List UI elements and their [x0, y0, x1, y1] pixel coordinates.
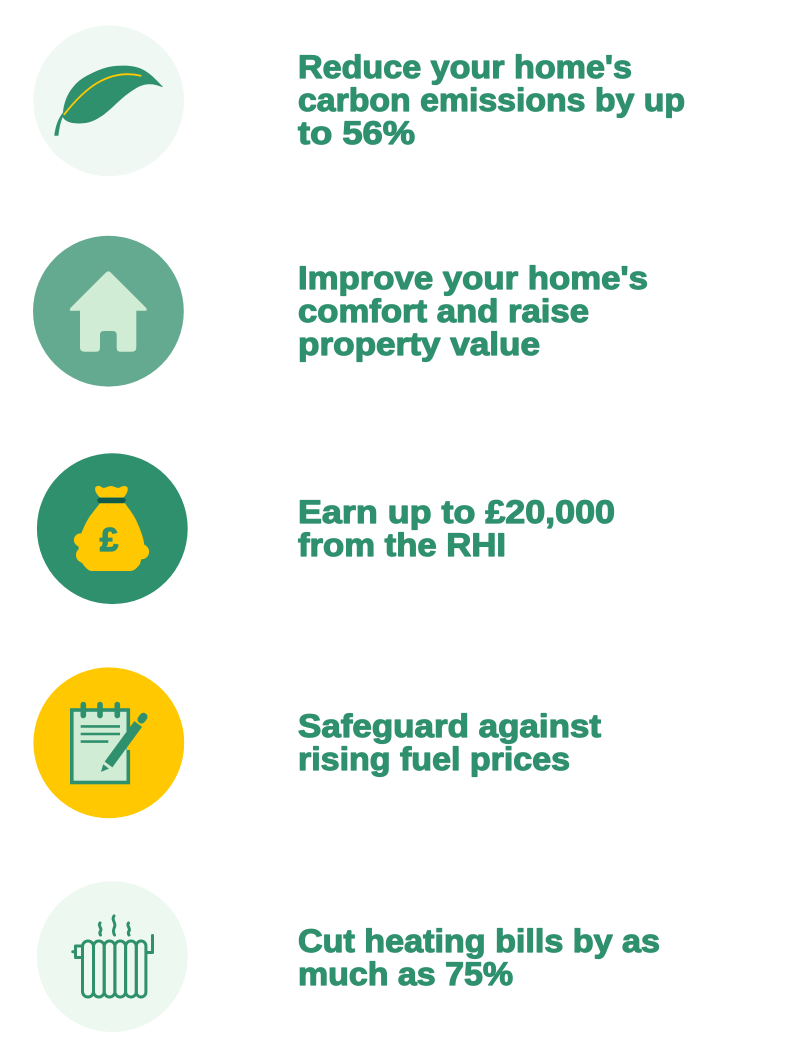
text: heating bills: much as 75%: [298, 956, 513, 992]
text: fuel prices: Safeguard against: [298, 708, 601, 744]
row: RHI earnings: [37, 453, 615, 604]
icon: pound sign: £: [100, 521, 119, 558]
icon: radiator: [37, 881, 188, 1032]
icon: leaf: [33, 25, 184, 176]
row: comfort and value: [33, 236, 648, 387]
text: RHI earnings: from the RHI: [298, 527, 506, 563]
row: heating bills: [37, 881, 660, 1032]
text: comfort and value: [298, 260, 648, 362]
text: carbon emissions: [298, 49, 685, 151]
icon: house: [33, 236, 184, 387]
text: heating bills: Cut heating bills by as: [298, 923, 660, 959]
text: comfort and value: comfort and raise: [298, 293, 589, 329]
icon: notepad and pencil: [33, 667, 184, 818]
row: fuel prices: [33, 667, 601, 818]
row: carbon emissions: [33, 25, 685, 176]
text: carbon emissions: carbon emissions by up: [298, 82, 685, 118]
text: comfort and value: property value: [298, 326, 540, 362]
text: RHI earnings: [298, 494, 615, 563]
icon: money bag: [37, 453, 188, 604]
text: comfort and value: Improve your home's: [298, 260, 648, 296]
text: carbon emissions: to 56%: [298, 115, 415, 151]
text: heating bills: [298, 923, 660, 992]
text: carbon emissions: Reduce your home's: [298, 49, 632, 85]
text: fuel prices: [298, 708, 601, 777]
text: RHI earnings: Earn up to £20,000: [298, 494, 615, 530]
text: fuel prices: rising fuel prices: [298, 741, 570, 777]
